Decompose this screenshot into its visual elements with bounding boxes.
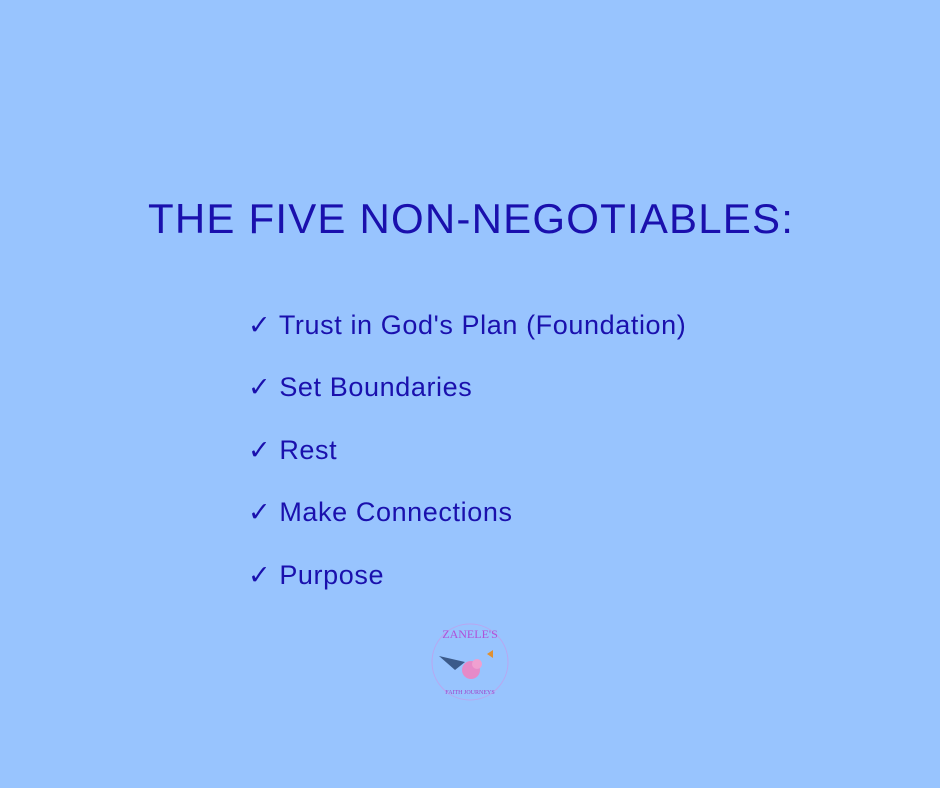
title: THE FIVE NON-NEGOTIABLES: bbox=[148, 195, 794, 242]
list item 5: ✓ Purpose bbox=[248, 560, 384, 590]
list item 2: ✓ Set Boundaries bbox=[248, 372, 472, 402]
list item 3: ✓ Rest bbox=[248, 435, 337, 465]
logo: FAITH JOURNEYS bbox=[445, 690, 495, 696]
list item 4: ✓ Make Connections bbox=[248, 497, 513, 527]
logo: ZANELE'S bbox=[442, 627, 498, 641]
logo bbox=[432, 624, 508, 700]
list item 1: ✓ Trust in God's Plan (Foundation) bbox=[248, 310, 686, 340]
